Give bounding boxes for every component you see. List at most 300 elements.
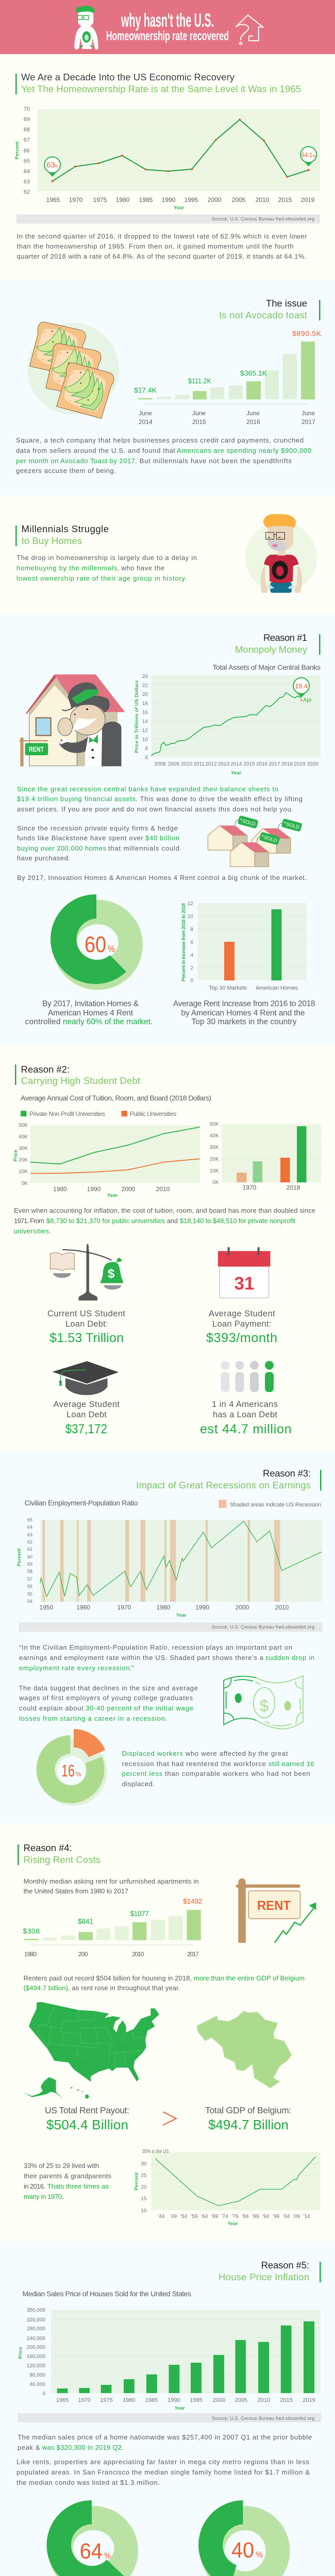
panel: avocado toast bbox=[0, 280, 335, 496]
donut chart: 60 percent: 60 bbox=[85, 932, 106, 957]
chart title: Average Annual Cost of Tuition, Room, and Board (2018 Dollars) bbox=[21, 1094, 211, 1102]
icon: sold houses: SOLD bbox=[286, 821, 300, 831]
heading: The issue bbox=[266, 298, 307, 309]
icon: avocado toast bbox=[27, 321, 119, 419]
line chart: total assets of major central banks: 2018 bbox=[281, 761, 293, 767]
source bar bbox=[16, 214, 320, 224]
caption: by American Homes 4 Rent and the bbox=[181, 1009, 305, 1018]
line chart: employment-population ratio: 54 bbox=[27, 1599, 32, 1604]
line chart: homeownership rate 1965-2019: 1985 bbox=[139, 196, 153, 204]
bar chart: avocado toast spending: 2014 bbox=[139, 418, 153, 426]
text block: private equity: buying over 200,000 homes bbox=[17, 844, 106, 852]
line chart: homeownership rate 1965-2019: 70 bbox=[24, 106, 30, 112]
map: united states bbox=[24, 2002, 159, 2099]
line chart: employment-population ratio: 1980 bbox=[157, 1604, 171, 1611]
line chart: employment-population ratio: 55 bbox=[27, 1591, 32, 1597]
bar chart: median sales price: 120,000 bbox=[27, 2363, 45, 2369]
line chart: employment-population ratio: Year bbox=[176, 1613, 187, 1618]
bar chart: avocado toast spending: 2015 bbox=[192, 418, 206, 426]
bar chart: tuition 1970 vs 2018: 10K bbox=[210, 1168, 219, 1174]
text block: Even when accounting for inflation, the cost of tuition, room, and board has more than doubled since bbox=[14, 1207, 315, 1214]
text block bbox=[16, 554, 197, 582]
text block: chart description: Monthly median asking rent for unfurnished apartments in bbox=[24, 1877, 199, 1885]
bar chart: median sales price: 350,000 bbox=[27, 2308, 45, 2313]
heading bbox=[18, 1842, 100, 1865]
line chart: employment-population ratio bbox=[16, 1517, 322, 1618]
text block: . bbox=[185, 574, 187, 582]
line chart: employment-population ratio: 62 bbox=[27, 1539, 32, 1545]
text block: $8,730 to $21,370 for public universities bbox=[46, 1217, 165, 1225]
source bar: Source: U.S. Census Bureau fred.stlouisfed.org bbox=[212, 2416, 314, 2421]
text block: per month on Avocado Toast by 2017 bbox=[16, 457, 135, 465]
line chart: tuition over time: 50K bbox=[19, 1123, 28, 1128]
line chart: total assets of major central banks: 2011 bbox=[193, 761, 205, 767]
heading: Rising Rent Costs bbox=[24, 1854, 100, 1865]
text block: quarter of 2018 with a rate of 64.8%. As of the second quarter of 2019, it stands at 64.1%. bbox=[16, 252, 306, 260]
legend bbox=[21, 1110, 176, 1117]
heading bbox=[136, 1468, 322, 1490]
line chart: living with parents: '89 bbox=[252, 2214, 259, 2219]
line chart: homeownership rate 1965-2019: Year bbox=[174, 205, 184, 211]
donut chart: 64 percent bbox=[38, 2500, 141, 2576]
line chart: homeownership rate 1965-2019: 2019 bbox=[301, 196, 315, 204]
panel: homeownership rate bbox=[0, 54, 335, 280]
bar chart: median sales price: 2000 bbox=[213, 2397, 225, 2403]
bar chart: tuition 1970 vs 2018 bbox=[210, 1122, 321, 1191]
title bbox=[106, 10, 229, 43]
heading: Monopoly Money bbox=[235, 644, 308, 655]
line chart: homeownership rate 1965-2019: 1990 bbox=[162, 196, 176, 204]
line chart: employment-population ratio: 61 bbox=[27, 1547, 32, 1552]
bar chart: median asking rent: $1492 bbox=[183, 1897, 203, 1905]
bar chart: tuition 1970 vs 2018: 1970 bbox=[243, 1184, 257, 1191]
callout: 19.4 pin: 19.4 bbox=[295, 682, 308, 690]
text block: Americans are spending nearly $900,000 bbox=[177, 447, 311, 454]
bar chart: median asking rent: 1980 bbox=[24, 1951, 37, 1958]
line chart: homeownership rate 1965-2019: 1995 bbox=[185, 196, 198, 204]
line chart: homeownership rate 1965-2019 bbox=[14, 106, 320, 211]
stat: average student loan payment: Average Student bbox=[209, 1309, 275, 1318]
heading: Impact of Great Recessions on Earnings bbox=[136, 1480, 311, 1490]
line chart: total assets of major central banks: 18 bbox=[142, 701, 148, 707]
bar chart: median sales price: 2019 bbox=[303, 2397, 315, 2403]
text block: living with parents: 33% of 25 to 29 lived with bbox=[24, 2162, 99, 2170]
line chart: total assets of major central banks: Year bbox=[231, 770, 241, 776]
line chart: tuition over time: 0K bbox=[22, 1181, 28, 1187]
line chart: total assets of major central banks: Price in Trillions of US Dollars bbox=[134, 680, 140, 753]
line chart: total assets of major central banks: 14 bbox=[142, 719, 148, 724]
bar chart: median sales price: 320,000 bbox=[27, 2317, 45, 2323]
callout: 64.1 percent pin: 64.1 bbox=[301, 151, 312, 159]
text block: rent payout: more than the entire GDP of Belgium bbox=[194, 1974, 305, 1982]
bar chart: median sales price: 2010 bbox=[258, 2397, 270, 2403]
text block: private equity bbox=[17, 824, 179, 862]
text block: The drop in homeownership is largely due to a delay in bbox=[16, 554, 197, 562]
legend: Shaded areas indicate US Recession bbox=[230, 1502, 321, 1508]
stat: belgium gdp: $494.7 Billion bbox=[208, 2117, 289, 2132]
text block bbox=[16, 436, 311, 474]
text block: recession quote: earnings and employment rate within the US. Shaded part shows there's a bbox=[19, 1654, 264, 1662]
text block: wage losses: could explain about bbox=[19, 1704, 83, 1712]
bar chart: median asking rent bbox=[23, 1897, 203, 1958]
line chart: living with parents: 10 bbox=[141, 2208, 147, 2214]
stat: us total rent payout bbox=[45, 2105, 129, 2132]
heading: House Price Inflation bbox=[219, 2272, 309, 2282]
text block: median sales price bbox=[18, 2433, 312, 2451]
line chart: living with parents: 30 bbox=[141, 2161, 147, 2167]
line chart: employment-population ratio: 63 bbox=[27, 1532, 32, 1537]
line chart: homeownership rate 1965-2019: 1965 bbox=[46, 196, 60, 204]
line chart: homeownership rate 1965-2019: 2000 bbox=[208, 196, 222, 204]
line chart: employment-population ratio: 2000 bbox=[236, 1604, 249, 1611]
line chart: total assets of major central banks: 16 bbox=[142, 710, 148, 716]
heading bbox=[15, 72, 301, 94]
panel: reason 5 house prices bbox=[0, 2241, 335, 2576]
line chart: tuition over time: 1990 bbox=[87, 1185, 101, 1193]
text block: rent payout: , as rent rose in throughout that year. bbox=[68, 1984, 180, 1992]
text block: displaced workers: still earned 16 bbox=[269, 1760, 314, 1768]
line chart: living with parents: '59 bbox=[191, 2214, 198, 2219]
heading: Reason #3: bbox=[263, 1468, 311, 1479]
line chart: total assets of major central banks: 12 bbox=[142, 728, 148, 734]
heading bbox=[15, 523, 109, 546]
bar chart: rent increase: 12 bbox=[188, 901, 193, 907]
icon: house with question mark bbox=[236, 15, 263, 44]
bar chart: median sales price: 1975 bbox=[100, 2397, 113, 2403]
bar chart: median sales price: 2015 bbox=[280, 2397, 293, 2403]
heading: Reason #5: bbox=[261, 2260, 309, 2270]
text block: wage losses: losses from starting a career in a recession bbox=[19, 1715, 165, 1722]
text block: rent payout bbox=[24, 1974, 305, 1992]
line chart: homeownership rate 1965-2019: 2015 bbox=[278, 196, 292, 204]
line chart: living with parents: 20 bbox=[141, 2184, 147, 2190]
text block: private equity: funds like Blackstone have spent over bbox=[17, 834, 144, 842]
bar chart: median sales price: Price bbox=[18, 2347, 24, 2359]
line chart: total assets of major central banks: 2014 bbox=[230, 761, 242, 767]
text block: median sales price: The median sales price of a home nationwide was $257,400 in 2007 Q1 at the prior bubble bbox=[18, 2433, 312, 2441]
callout: 19.4 pin bbox=[293, 678, 312, 703]
bar chart: rent increase: Top 30 Markets bbox=[209, 985, 247, 991]
bar chart: median sales price: 240,000 bbox=[27, 2336, 45, 2342]
text block: median sales price: peak & bbox=[18, 2444, 40, 2451]
text block: displaced workers: Displaced workers bbox=[122, 1750, 183, 1757]
bar chart: avocado toast spending: 2017 bbox=[301, 418, 315, 426]
bar chart: tuition 1970 vs 2018: 40K bbox=[210, 1133, 219, 1139]
bar chart: tuition 1970 vs 2018: 0K bbox=[212, 1180, 219, 1185]
heading: Carrying High Student Debt bbox=[21, 1075, 140, 1086]
bar chart: median sales price: 160,000 bbox=[27, 2354, 45, 2360]
title: Homeownership rate recovered bbox=[106, 29, 229, 43]
text block: . But millennials have not been the spendthrifts bbox=[135, 457, 292, 465]
line chart: homeownership rate 1965-2019: Percent bbox=[14, 141, 20, 159]
stat: average student loan payment: $393/month bbox=[206, 1331, 277, 1345]
text block: private equity: $40 billion bbox=[145, 834, 179, 842]
bar chart: median sales price: 280,000 bbox=[27, 2326, 45, 2332]
heading bbox=[15, 1064, 140, 1086]
text block: central banks: asset prices. If you are poor and do not own financial assets this does not help you. bbox=[17, 805, 293, 813]
text block: mega city metro regions bbox=[16, 2458, 310, 2486]
line chart: living with parents: '79 bbox=[231, 2214, 239, 2219]
line chart: total assets of major central banks: 2009 bbox=[168, 761, 179, 767]
source bar: Source: U.S. Census Bureau fred.stlouisfed.org bbox=[212, 1624, 314, 1630]
line chart: employment-population ratio: 65 bbox=[27, 1517, 32, 1522]
stat: average student loan debt: $37,172 bbox=[65, 1422, 107, 1436]
line chart: homeownership rate 1965-2019: 2005 bbox=[232, 196, 246, 204]
text block: wage losses: 30-40 percent of the initial wage bbox=[86, 1704, 193, 1712]
line chart: employment-population ratio: 59 bbox=[27, 1562, 32, 1567]
icon: rent sign with rising arrow bbox=[236, 1878, 316, 1943]
panel: reason 3 recessions bbox=[0, 1452, 335, 1824]
line chart: total assets of major central banks: Total Assets of Major Central Banks bbox=[212, 663, 321, 671]
bar chart: tuition 1970 vs 2018: 50K bbox=[210, 1122, 219, 1127]
line chart: total assets of major central banks bbox=[134, 663, 321, 776]
text block: private equity: Since the recession private equity firms & hedge bbox=[17, 824, 178, 832]
line chart: employment-population ratio: 1990 bbox=[195, 1604, 209, 1611]
text block: wage losses: . bbox=[165, 1715, 167, 1722]
callout: 64.1 percent pin: % bbox=[312, 155, 315, 158]
caption: . bbox=[150, 1018, 153, 1026]
map: alaska and hawaii bbox=[24, 2077, 89, 2099]
caption bbox=[173, 999, 315, 1026]
line chart: employment-population ratio: 2010 bbox=[275, 1604, 289, 1611]
line chart: homeownership rate 1965-2019: 62 bbox=[24, 189, 30, 195]
donut chart: 64 percent: % bbox=[104, 2551, 111, 2561]
bar chart: median asking rent: 2010 bbox=[132, 1951, 144, 1958]
line chart: tuition over time: 2010 bbox=[156, 1185, 170, 1193]
text block: recession quote: employment rate every recession bbox=[19, 1664, 130, 1672]
chart title: Civilian Employment-Population Ratio bbox=[25, 1499, 138, 1507]
source bar bbox=[18, 2413, 321, 2422]
bar chart: median asking rent: 200 bbox=[78, 1951, 88, 1958]
stat: current student loan debt: $ bbox=[108, 1267, 115, 1281]
line chart: total assets of major central banks: 8 bbox=[145, 746, 148, 752]
line chart: living with parents: '44 bbox=[158, 2214, 165, 2219]
line chart: employment-population ratio: Percent bbox=[16, 1548, 22, 1566]
line chart: employment-population ratio: 1950 bbox=[40, 1604, 54, 1611]
line chart: tuition over time: Price bbox=[13, 1149, 19, 1162]
line chart: living with parents: Year bbox=[227, 2221, 238, 2227]
line chart: total assets of major central banks: 2008 bbox=[154, 761, 166, 767]
heading bbox=[219, 2260, 321, 2282]
heading: to Buy Homes bbox=[22, 535, 82, 546]
bar chart: avocado toast spending: 2016 bbox=[246, 418, 260, 426]
donut chart: 16 percent bbox=[37, 1729, 107, 1806]
text block: In the second quarter of 2016, it dropped to the lowest rate of 62.9% which is even lower bbox=[16, 232, 307, 240]
text block: data from sellers around the U.S. and found that bbox=[16, 447, 175, 454]
icon: monopoly man with rental house bbox=[19, 674, 125, 766]
line chart: tuition over time: 20K bbox=[19, 1157, 28, 1163]
text block: wage losses bbox=[19, 1684, 198, 1722]
line chart: total assets of major central banks: 2013 bbox=[218, 761, 230, 767]
caption: American Homes 4 Rent bbox=[48, 1009, 133, 1018]
text block: recession quote: .” bbox=[130, 1664, 134, 1672]
line chart: living with parents: '64 bbox=[201, 2214, 208, 2219]
bar chart: avocado toast spending: $111.2K bbox=[188, 377, 212, 385]
line chart: tuition over time bbox=[13, 1123, 200, 1198]
bar chart: rent increase: 6 bbox=[190, 940, 193, 945]
callout: 63 percent pin: 63 bbox=[46, 161, 55, 170]
line chart: living with parents: '74 bbox=[221, 2214, 228, 2219]
line chart: tuition over time: 40K bbox=[19, 1134, 28, 1140]
text block: . bbox=[49, 1227, 51, 1235]
bar chart: median asking rent: $308 bbox=[23, 1927, 40, 1935]
bar chart: rent increase: 2 bbox=[190, 965, 193, 971]
icon: sold houses bbox=[208, 815, 303, 867]
text block: median sales price: . bbox=[122, 2444, 124, 2451]
text block: private equity: have purchased. bbox=[17, 854, 70, 862]
bar chart: median sales price: 1965 bbox=[56, 2397, 69, 2403]
icon: dollar bill: $ bbox=[260, 1697, 269, 1715]
line chart: employment-population ratio: 56 bbox=[27, 1584, 32, 1589]
stat: current student loan debt: $1.53 Trillion bbox=[49, 1331, 124, 1345]
icon: graduation cap bbox=[53, 1361, 119, 1395]
callout: 63 percent pin bbox=[44, 157, 60, 177]
bar chart: median sales price: 1995 bbox=[190, 2397, 203, 2403]
donut chart: 60 percent: % bbox=[108, 944, 115, 954]
text block bbox=[14, 1207, 315, 1235]
bar chart: rent increase: Percent in increase from 2016 to 2018 bbox=[181, 903, 187, 981]
heading: Reason #2: bbox=[21, 1064, 70, 1075]
line chart: employment-population ratio: 57 bbox=[27, 1577, 32, 1582]
stat: average student loan debt: Loan Debt bbox=[66, 1410, 107, 1419]
icon: millennial character bbox=[74, 6, 98, 50]
bar chart: median asking rent: $841 bbox=[78, 1917, 93, 1925]
donut chart: 40 percent: 40 bbox=[231, 2538, 254, 2563]
text block: living with parents: many in 1970 bbox=[24, 2193, 62, 2200]
line chart: total assets of major central banks: 22 bbox=[142, 683, 148, 688]
legend bbox=[219, 1500, 321, 1508]
bar chart: rent increase: American Homes bbox=[256, 985, 298, 991]
bar chart: avocado toast spending: June bbox=[301, 410, 315, 417]
bar chart: median asking rent: 2017 bbox=[187, 1951, 199, 1958]
donut chart: 40 percent: % bbox=[256, 2550, 263, 2560]
bar chart: median sales price: 1990 bbox=[167, 2397, 180, 2403]
icon: rent sign with rising arrow: RENT bbox=[257, 1899, 291, 1913]
bar chart: median sales price: Year bbox=[175, 2405, 185, 2411]
text block: central banks: $19.4 trillion buying financial assets bbox=[17, 795, 136, 803]
heading: Yet The Homeownership Rate is at the Same Level it Was in 1965 bbox=[21, 83, 301, 94]
text block bbox=[16, 232, 307, 260]
text block: wage losses: wages of first employers of young college graduates bbox=[19, 1694, 193, 1702]
line chart: employment-population ratio: 64 bbox=[27, 1524, 32, 1530]
icon: scales with book and money bag bbox=[50, 1244, 123, 1300]
bar chart: median sales price: 1980 bbox=[123, 2397, 136, 2403]
bar chart: avocado toast spending bbox=[134, 329, 322, 426]
stat: current student loan debt: Current US Student bbox=[47, 1309, 125, 1318]
stat: one in four americans: 1 in 4 Americans bbox=[212, 1400, 278, 1409]
bar chart: rent increase: 10 bbox=[188, 914, 193, 920]
bar chart: rent increase bbox=[173, 901, 315, 1026]
bar chart: median sales price: 200,000 bbox=[27, 2345, 45, 2350]
icon: millennial with empty pockets bbox=[245, 514, 317, 593]
text block: Square, a tech company that helps businesses process credit card payments, crunched bbox=[16, 436, 304, 444]
text block: rent payout: Renters paid out record $504 billion for housing in 2018, bbox=[24, 1974, 192, 1982]
heading: Reason #1 bbox=[263, 632, 307, 643]
stat: belgium gdp bbox=[205, 2105, 292, 2132]
icon: sold houses: SOLD bbox=[242, 818, 256, 827]
line chart: total assets of major central banks: 2010 bbox=[181, 761, 193, 767]
stat: current student loan debt bbox=[47, 1244, 125, 1345]
line chart: living with parents: 15 bbox=[141, 2196, 147, 2202]
line chart: tuition over time: 10K bbox=[19, 1169, 28, 1175]
bar chart: median sales price: 40,000 bbox=[29, 2382, 45, 2387]
panel: reason 2 student debt bbox=[0, 1045, 335, 1452]
text block: mega city metro regions: Like rents, properties are appreciating far faster in mega city metro regions than in less bbox=[16, 2458, 309, 2466]
line chart: homeownership rate 1965-2019: 2010 bbox=[256, 196, 270, 204]
text block: recession quote: “In the Civilian Employment-Population Ratio, recession plays an important part on bbox=[19, 1643, 292, 1651]
heading bbox=[219, 298, 321, 320]
panel: reason 4 rent bbox=[0, 1824, 335, 2241]
line chart: total assets of major central banks: 2020 bbox=[307, 761, 319, 767]
heading: Is not Avocado toast bbox=[219, 310, 307, 320]
source bar bbox=[19, 1622, 323, 1632]
text block: 1971. From bbox=[14, 1217, 44, 1225]
line chart: homeownership rate 1965-2019: 66 bbox=[24, 148, 30, 154]
line chart: tuition over time: 2000 bbox=[122, 1185, 136, 1193]
bar chart: tuition 1970 vs 2018: 2018 bbox=[287, 1184, 300, 1191]
rent label: RENT bbox=[29, 745, 44, 753]
text block: lowest ownership rate of their age group in history bbox=[16, 574, 186, 582]
text block: displaced workers: percent less bbox=[122, 1770, 163, 1777]
stat: average student loan payment: 31 bbox=[234, 1274, 254, 1294]
bar chart: rent increase: 0 bbox=[190, 978, 193, 984]
text block: $18,140 to $48,510 for private nonprofit bbox=[180, 1217, 295, 1225]
callout: 19.4 pin: Apr bbox=[303, 697, 312, 703]
stat: us total rent payout: $504.4 Billion bbox=[46, 2117, 128, 2132]
text block: and bbox=[167, 1217, 178, 1225]
text block: displaced workers: than comparable workers who had not been bbox=[165, 1770, 310, 1777]
line chart: total assets of major central banks: 2017 bbox=[269, 761, 280, 767]
line chart: living with parents: '54 bbox=[180, 2214, 188, 2219]
line chart: living with parents: '69 bbox=[211, 2214, 219, 2219]
line chart: employment-population ratio: 1970 bbox=[118, 1604, 131, 1611]
text block: market control: By 2017, Innovation Homes & American Homes 4 Rent control a big chunk of the market. bbox=[17, 874, 307, 882]
text block: central banks bbox=[17, 785, 303, 813]
caption: controlled bbox=[25, 1018, 61, 1026]
panel: reason 1 monopoly money bbox=[0, 614, 335, 1045]
source bar: Source: U.S. Census Bureau fred.stlouisfed.org bbox=[212, 216, 314, 222]
bar chart: avocado toast spending: June bbox=[192, 410, 206, 417]
caption: By 2017, Invitation Homes & bbox=[42, 999, 139, 1008]
line chart: total assets of major central banks: 2016 bbox=[256, 761, 268, 767]
donut chart: 64 percent: 64 bbox=[80, 2539, 103, 2564]
stat: one in four americans: est 44.7 million bbox=[200, 1422, 292, 1436]
line chart: living with parents: 35% in the US bbox=[142, 2149, 169, 2155]
bar chart: median sales price bbox=[18, 2308, 321, 2411]
text block: mega city metro regions: populated areas. In San Francisco the median single family home listed for $1.7 million & bbox=[16, 2468, 310, 2476]
title: why hasn't the U.S. bbox=[121, 10, 214, 31]
text block: central banks: . This was done to drive the wealth effect by lifting bbox=[136, 795, 303, 803]
map: belgium bbox=[197, 2011, 292, 2088]
donut chart: 60 percent bbox=[25, 894, 153, 1026]
bar chart: tuition 1970 vs 2018: 20K bbox=[210, 1157, 219, 1162]
text block: than the homeownership of 1965. From then on, it gained momentum until the fourth bbox=[16, 242, 294, 250]
stat: average student loan debt bbox=[53, 1361, 120, 1436]
stat: one in four americans bbox=[200, 1361, 292, 1436]
line chart: tuition over time: 30K bbox=[19, 1146, 28, 1151]
text block: median sales price: was $320,300 in 2019 Q2 bbox=[42, 2444, 122, 2451]
donut chart: 16 percent: 16 bbox=[61, 1761, 75, 1780]
icon: dollar bill bbox=[224, 1676, 303, 1729]
text block: geezers accuse them of being. bbox=[16, 467, 116, 474]
line chart: total assets of major central banks: 2012 bbox=[205, 761, 217, 767]
icon: calendar bbox=[218, 1247, 270, 1298]
line chart: homeownership rate 1965-2019: 65 bbox=[24, 158, 30, 164]
stat: us total rent payout: US Total Rent Payout: bbox=[45, 2105, 129, 2115]
bar chart: median sales price: 0 bbox=[42, 2391, 45, 2397]
chart title: Median Sales Price of Houses Sold for the United States bbox=[23, 2290, 191, 2298]
text block: central banks: Since the great recession central banks have expanded their balance sheets to bbox=[17, 785, 278, 793]
